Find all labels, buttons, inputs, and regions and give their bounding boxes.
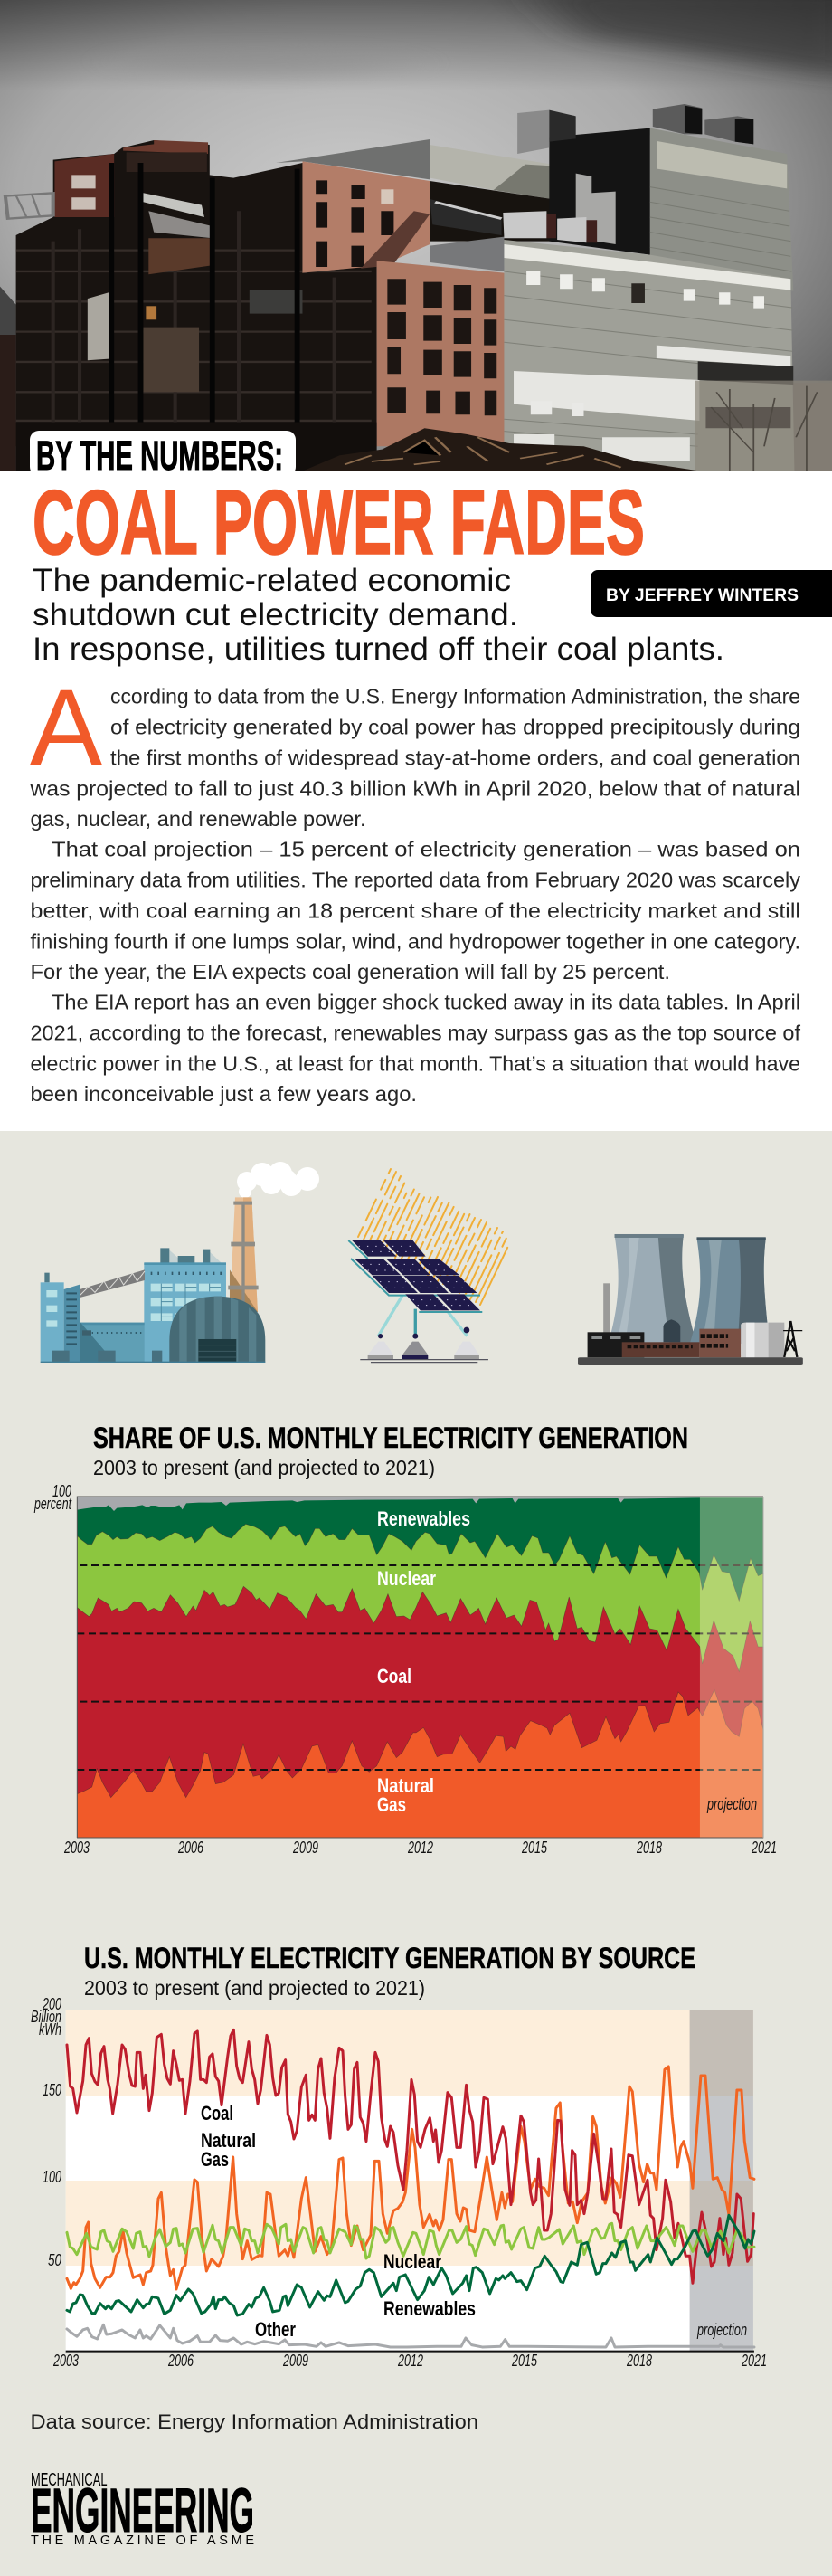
x axis: generation by source: 2003 [52,2352,79,2370]
article body text [29,685,801,1106]
article body text: gas, nuclear, and renewable power. [31,807,366,831]
line: other [67,2324,754,2347]
line chart: generation by source [66,2010,754,2353]
hero photo: derelict coal plant [0,0,832,471]
chart labels: share of generation: Natural [377,1774,434,1797]
chart labels: share of generation: Gas [377,1793,406,1816]
article body text: better, with coal earning an 18 percent share of the electricity market and still [31,899,800,923]
icon: coal plant [41,1197,265,1363]
chart labels: share of generation: 100 [52,1482,71,1500]
area: natural gas [77,1689,763,1838]
line: coal [67,2029,753,2283]
article body text: ccording to data from the U.S. Energy Information Administration, the share [110,685,800,708]
x axis: generation by source: 2018 [626,2352,652,2370]
x axis: share of generation: 2018 [636,1839,662,1857]
logo: Mechanical Engineering [31,2470,254,2548]
article body text: been inconceivable just a few years ago. [31,1082,417,1106]
drop cap: A [30,667,102,788]
area: nuclear [77,1524,763,1838]
chart labels: share of generation: percent [33,1495,72,1513]
y axis: generation by source: 50 [48,2251,61,2269]
icon: smoke cloud [237,1162,319,1198]
x axis: share of generation: 2015 [521,1839,548,1857]
chart labels: share of generation: Coal [377,1665,411,1687]
area: coal [77,1586,763,1838]
x axis: share of generation [63,1839,777,1857]
chart labels: generation by source: Other [255,2318,296,2341]
article body text: For the year, the EIA expects coal generation will fall by 25 percent. [31,960,670,984]
y axis: generation by source: 200 [42,1995,61,2013]
x axis: share of generation: 2021 [751,1839,777,1857]
subheading: The pandemic-related economic [33,563,511,598]
x axis: generation by source: 2006 [167,2352,194,2370]
x axis: generation by source [52,2352,767,2370]
line: nuclear [67,2223,754,2258]
chart labels: generation by source: Coal [201,2102,233,2124]
article body text: preliminary data from utilities. The reported data from February 2020 was scarcely [31,869,801,892]
area: renewables [77,1497,763,1838]
x axis: share of generation: 2012 [407,1839,433,1857]
chart heading: generation by source: 2003 to present (and projected to 2021) [84,1976,425,2000]
y axis: generation by source: kWh [39,2020,61,2039]
chart labels: generation by source [201,2102,747,2341]
logo: Mechanical Engineering: ENGINEERING [31,2476,254,2545]
chart heading: share of generation: SHARE OF U.S. MONTHLY ELECTRICITY GENERATION [93,1421,688,1454]
icon: solar panel array [348,1240,488,1363]
icon: nuclear plant [578,1234,803,1365]
chart heading: generation by source [84,1942,695,2000]
x axis: share of generation: 2003 [63,1839,90,1857]
y axis: generation by source: Billion [31,2008,61,2026]
chart heading: share of generation [93,1421,688,1479]
line: natural gas [67,2067,754,2289]
article body text: finishing fourth if one lumps solar, wind, and hydropower together in one category. [31,929,800,953]
chart heading: share of generation: 2003 to present (and projected to 2021) [93,1456,435,1479]
kicker tab: By the Numbers [30,431,296,479]
y axis: generation by source [31,1995,61,2269]
data source note: Data source: Energy Information Administration [31,2410,478,2433]
x axis: generation by source: 2009 [282,2352,308,2370]
projection band [690,2010,753,2351]
subheading: shutdown cut electricity demand. [33,597,518,632]
x axis: generation by source: 2015 [511,2352,538,2370]
article body text: was projected to fall to just 40.3 billion kWh in April 2020, below that of natural [29,776,800,800]
chart labels: generation by source: projection [696,2321,747,2339]
article body text: That coal projection – 15 percent of electricity generation – was based on [52,838,800,861]
subheading [33,563,724,667]
chart labels: share of generation: Renewables [377,1507,470,1530]
x axis: generation by source: 2021 [741,2352,767,2370]
chart labels: generation by source: Renewables [383,2297,476,2320]
subheading: In response, utilities turned off their coal plants. [33,632,724,667]
chart labels: share of generation [33,1482,757,1816]
y axis: generation by source: 150 [43,2081,61,2099]
projection overlay [700,1497,763,1838]
article body text: electric power in the U.S., at least for that month. That’s a situation that would have [31,1051,800,1075]
chart labels: generation by source: Natural [201,2129,256,2152]
line: renewables [67,2215,754,2315]
byline tag: BY JEFFREY WINTERS [606,586,799,605]
chart labels: share of generation: projection [706,1795,757,1813]
article body text: the first months of widespread stay-at-home orders, and coal generation [110,746,800,770]
y axis: generation by source: 100 [43,2168,61,2186]
x axis: share of generation: 2006 [177,1839,204,1857]
chart labels: generation by source: Nuclear [383,2250,441,2273]
article body text: of electricity generated by coal power has dropped precipitously during [110,716,800,739]
x axis: share of generation: 2009 [292,1839,318,1857]
chart labels: share of generation: Nuclear [377,1567,436,1590]
icon: sun rays [358,1169,509,1305]
byline tag [591,570,832,617]
logo: Mechanical Engineering: THE MAGAZINE OF ASME [31,2533,254,2548]
article body text: The EIA report has an even bigger shock tucked away in its data tables. In April [52,991,800,1014]
kicker tab: By the Numbers: BY THE NUMBERS: [36,433,283,479]
logo: Mechanical Engineering: MECHANICAL [31,2470,107,2490]
x axis: generation by source: 2012 [397,2352,423,2370]
chart labels: generation by source: Gas [201,2148,229,2171]
article body text: 2021, according to the forecast, renewables may surpass gas as the top source of [31,1021,801,1044]
stacked area chart: share of generation [77,1497,763,1838]
